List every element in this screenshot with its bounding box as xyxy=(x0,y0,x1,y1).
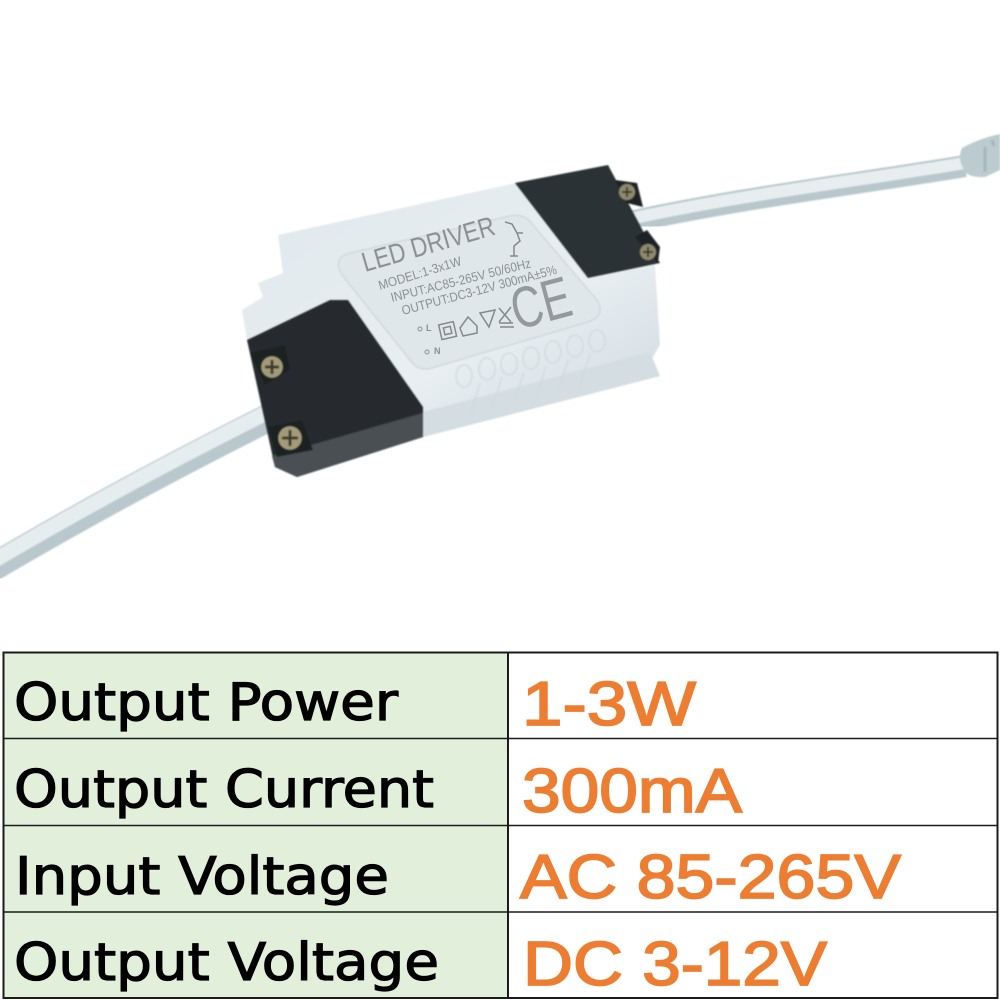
row: output current xyxy=(14,757,743,826)
row: input voltage: Input Voltage xyxy=(15,847,389,907)
label text: LED DRIVER xyxy=(358,210,498,278)
right cable with strain relief xyxy=(630,134,1000,222)
certification icons xyxy=(439,307,514,340)
label area: MODEL:1-3x1W xyxy=(376,253,464,293)
terminal markings: L xyxy=(426,323,432,333)
row: output current: 300mA xyxy=(522,757,743,826)
driver housing, light section xyxy=(242,181,660,437)
CE mark: CE xyxy=(504,264,578,343)
row: output voltage: DC 3-12V xyxy=(523,930,828,999)
row: output voltage: Output Voltage xyxy=(14,933,439,993)
row: output voltage xyxy=(14,930,828,999)
label area: INPUT:AC85-265V 50/60Hz xyxy=(389,256,532,305)
terminal markings: N xyxy=(434,346,440,356)
terminal markings xyxy=(418,323,440,356)
specification table xyxy=(3,652,998,999)
label column background xyxy=(3,652,508,998)
row: output power xyxy=(14,670,697,739)
dark terminal cap, left xyxy=(247,300,423,477)
screws xyxy=(261,356,302,450)
circuit symbol xyxy=(505,222,523,256)
row: input voltage xyxy=(15,843,902,912)
row: input voltage: AC 85-265V xyxy=(520,843,902,912)
label area xyxy=(338,210,600,369)
row: output power: Output Power xyxy=(14,673,399,733)
table grid xyxy=(3,652,998,998)
row: output current: Output Current xyxy=(14,760,434,820)
dark terminal cap, right xyxy=(515,165,660,278)
label area: OUTPUT:DC3-12V 300mA±5% xyxy=(400,262,559,318)
product photo: LED driver with cables xyxy=(0,134,1000,570)
left cable xyxy=(0,406,280,570)
row: output power: 1-3W xyxy=(522,670,697,739)
